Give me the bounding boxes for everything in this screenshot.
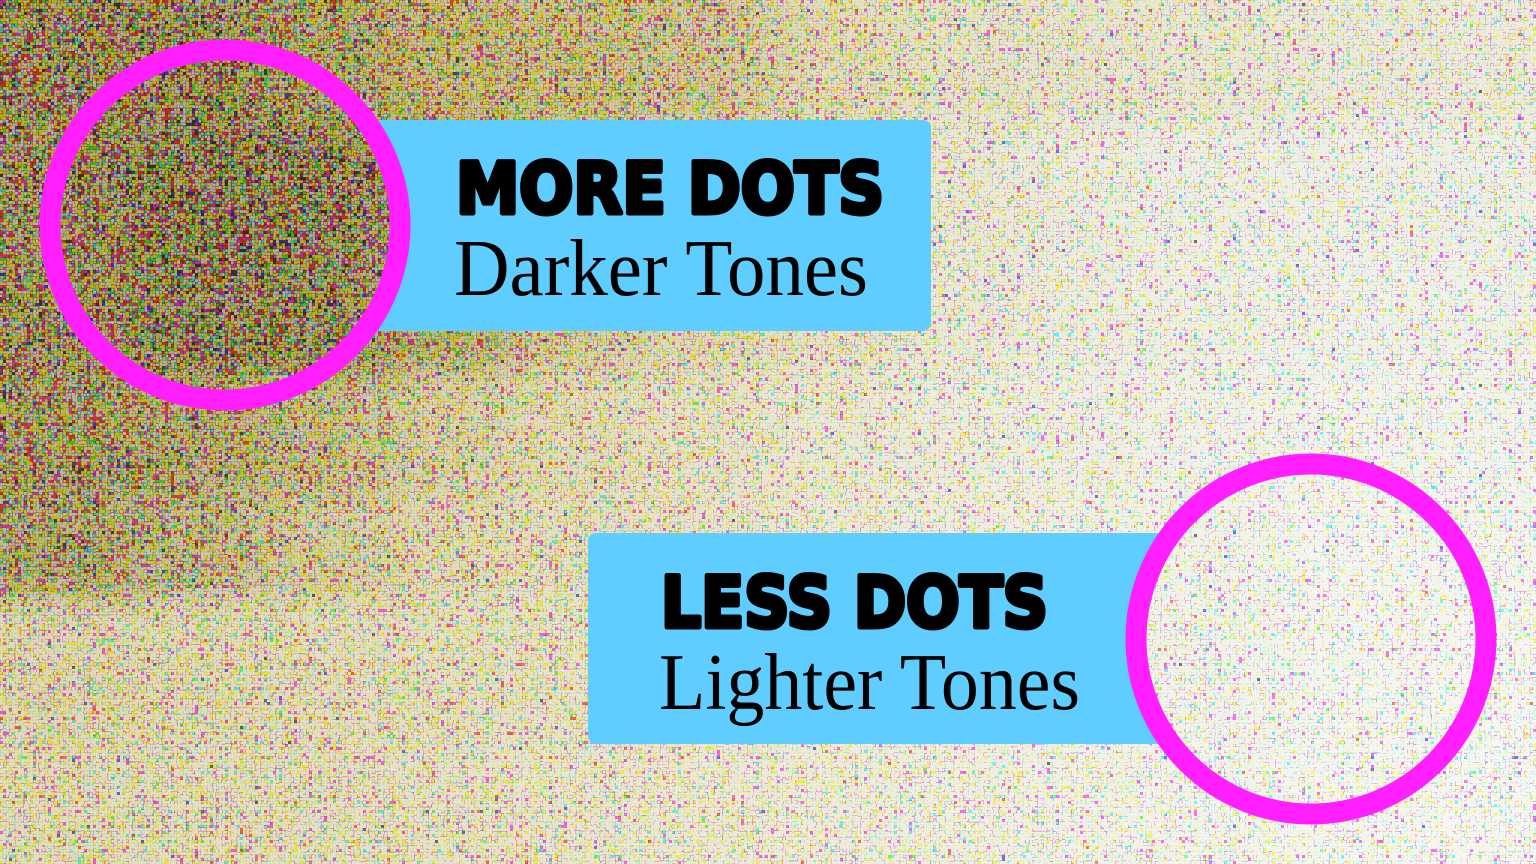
callout: less dots, lighter tones xyxy=(588,464,1486,814)
panel: lighter tones label xyxy=(588,533,1172,744)
text: darker tones: Darker Tones xyxy=(454,223,868,313)
heading: less dots: LESS DOTS xyxy=(661,562,1048,644)
callout: more dots, darker tones xyxy=(50,50,931,400)
heading: more dots: MORE DOTS xyxy=(456,148,884,230)
icon: magnifier ring over dark area xyxy=(50,50,400,400)
panel: darker tones label xyxy=(365,120,931,331)
text: lighter tones: Lighter Tones xyxy=(659,637,1080,727)
icon: magnifier ring over light area xyxy=(1136,464,1486,814)
